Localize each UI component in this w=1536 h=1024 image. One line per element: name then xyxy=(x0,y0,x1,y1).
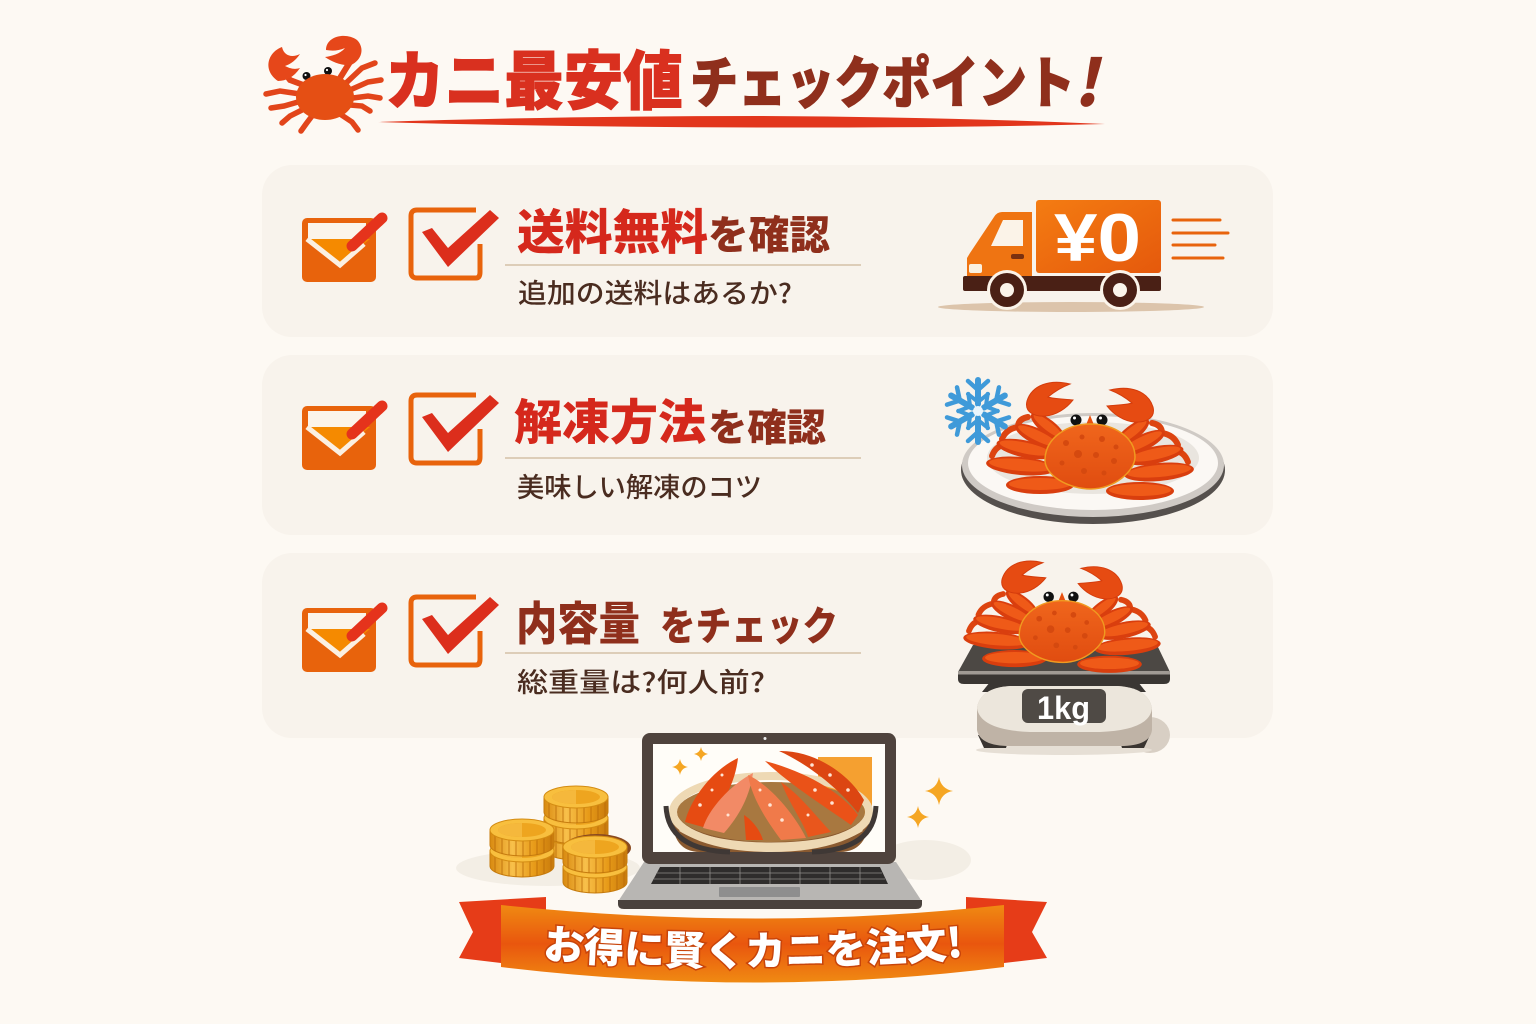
heading: thawing method: 解凍方法 xyxy=(514,383,706,453)
icon: title crab xyxy=(266,36,381,131)
icon: sparkles xyxy=(907,777,953,828)
icon: envelope xyxy=(302,608,382,672)
title xyxy=(266,31,1115,131)
price label: ¥0 xyxy=(1054,200,1141,276)
icon: checkbox xyxy=(411,597,499,665)
title underline brush xyxy=(378,116,1105,128)
icon: laptop xyxy=(618,733,922,909)
heading: content amount: 内容量 xyxy=(516,588,640,654)
title text: red: カニ最安値 xyxy=(385,31,683,123)
illustration: laptop with coins xyxy=(456,733,1047,982)
weight label: 1kg xyxy=(1037,690,1090,726)
panel: quantity xyxy=(262,553,1273,755)
icon: snowflake xyxy=(944,377,1012,445)
subtext: 美味しい解凍のコツ xyxy=(517,466,762,505)
icon: checkbox xyxy=(411,210,499,278)
icon: envelope xyxy=(302,218,382,282)
icon: truck with yen zero xyxy=(938,200,1228,312)
screen: basket of crab legs xyxy=(666,751,876,852)
heading suffix: をチェック xyxy=(660,594,838,652)
icon: coin stacks xyxy=(490,786,631,893)
heading suffix: を確認 xyxy=(708,397,826,452)
banner text: お得に賢くカニを注文! xyxy=(544,923,961,972)
heading: free shipping: 送料無料 xyxy=(517,193,708,263)
icon: checkbox xyxy=(411,395,499,463)
banner xyxy=(459,897,1047,982)
subtext: 総重量は?何人前? xyxy=(517,661,765,700)
subtext: 追加の送料はあるか? xyxy=(518,272,792,311)
panel: thawing xyxy=(262,355,1273,535)
exclamation mark: ! xyxy=(1069,32,1115,125)
icon: envelope xyxy=(302,406,382,470)
banner text: お得に賢くカニを注文! xyxy=(546,924,960,970)
heading suffix: を確認 xyxy=(708,203,830,261)
icon: crab on scale xyxy=(958,561,1170,755)
title text: brown: チェックポイント xyxy=(690,39,1075,120)
panel: shipping xyxy=(262,165,1273,337)
icon: crab on plate xyxy=(961,382,1225,524)
